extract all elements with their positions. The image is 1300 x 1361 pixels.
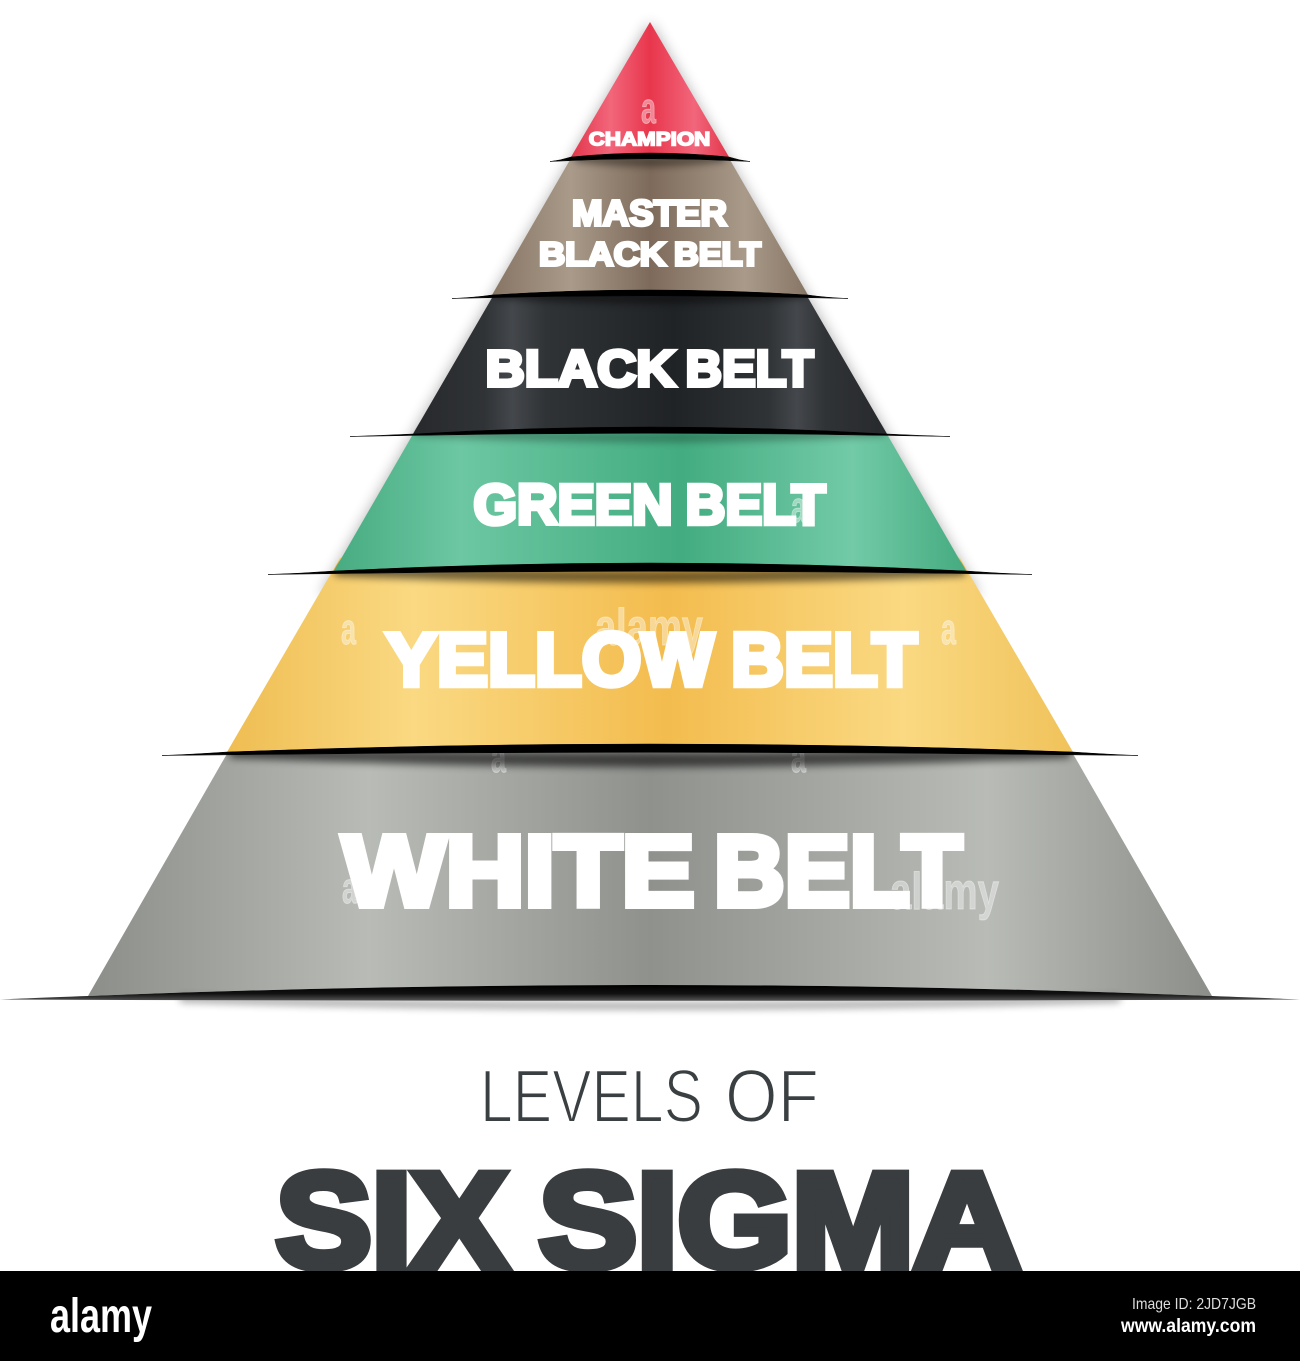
watermark letters on yellow belt: a: [341, 605, 356, 654]
watermark letters on white belt: a: [342, 864, 357, 913]
watermark letters on white belt: alamy: [890, 863, 999, 921]
shadow of green belt: [335, 563, 965, 583]
website: www.alamy.com: [1120, 1316, 1256, 1337]
master black belt shape: [492, 146, 808, 295]
panel: green belt tier: [268, 422, 1032, 583]
label: champion: CHAMPION: [589, 128, 710, 150]
footer bar: [0, 1271, 1300, 1361]
panel: white belt tier: [0, 733, 1300, 1009]
soft glow behind upper pyramid: [320, 22, 980, 596]
panel: yellow belt tier: [162, 558, 1138, 767]
heading: six sigma: SIGMA: [539, 1145, 1020, 1296]
label: master black belt: BELT: [674, 236, 761, 272]
label: yellow belt: BELT: [731, 618, 917, 702]
heading: levels of: LEVELS: [480, 1054, 703, 1138]
shadow of black belt: [415, 427, 885, 442]
slit under master black belt: [452, 290, 848, 298]
slit under green belt: [268, 563, 1032, 574]
footer logo: alamy: [50, 1290, 152, 1343]
label: white belt: BELT: [714, 816, 962, 928]
label: black belt: [486, 340, 814, 397]
label: black belt: BLACK: [486, 340, 676, 397]
label: green belt: BELT: [686, 473, 826, 537]
watermark letter on champion: a: [641, 84, 656, 133]
label: white belt: [342, 816, 962, 928]
slit under black belt: [350, 427, 950, 436]
label: black belt: BELT: [686, 340, 814, 397]
slit under white belt: [0, 985, 1300, 1009]
watermark letters on yellow belt: a: [941, 605, 956, 654]
champion shape: [571, 22, 729, 157]
label: master black belt: BLACK: [539, 236, 666, 272]
label: white belt: WHITE: [342, 816, 694, 928]
watermark letters on yellow belt: [341, 599, 956, 657]
label: yellow belt: [386, 618, 917, 702]
label: green belt: [474, 473, 826, 537]
watermark letters on yellow belt: alamy: [595, 599, 703, 657]
heading: levels of: OF: [725, 1054, 819, 1138]
shadow of master black belt: [491, 296, 809, 304]
watermark letters on white belt: a: [491, 733, 506, 782]
label: yellow belt: YELLOW: [386, 618, 714, 702]
watermark letter on green belt: a: [791, 483, 806, 532]
watermark letters on white belt: a: [791, 733, 806, 782]
shadow of champion: [575, 154, 725, 166]
shadow of yellow belt: [230, 744, 1070, 767]
panel: black belt tier: [350, 284, 950, 442]
panel: champion tier: [550, 22, 750, 166]
white belt shape: [88, 745, 1212, 996]
heading: six sigma: [276, 1145, 1020, 1296]
label: master black belt: [539, 193, 761, 272]
label: green belt: GREEN: [474, 473, 672, 537]
black belt shape: [413, 284, 887, 434]
watermark letters on white belt: [342, 733, 999, 921]
heading: six sigma: SIX: [276, 1145, 507, 1296]
yellow belt shape: [227, 558, 1073, 752]
image id: Image ID: 2JD7JGB: [1132, 1296, 1256, 1313]
label: master black belt: MASTER: [572, 193, 727, 234]
slit under champion: [550, 153, 750, 162]
slit under yellow belt: [162, 744, 1138, 756]
green belt shape: [334, 422, 966, 571]
panel: master black belt tier: [452, 146, 848, 303]
